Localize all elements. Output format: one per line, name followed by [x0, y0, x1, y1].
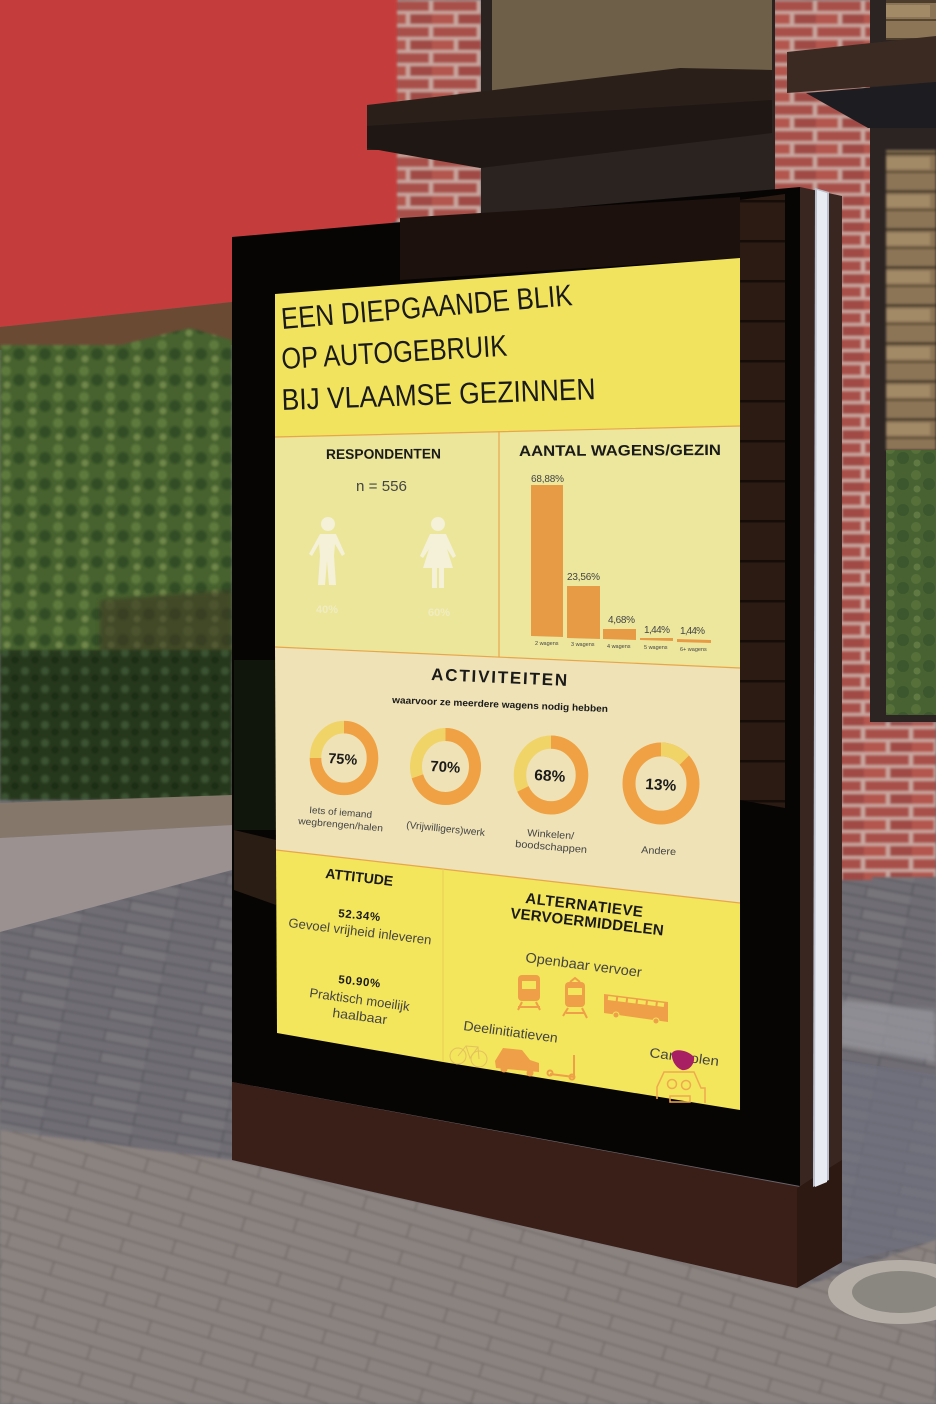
label: [297, 805, 383, 834]
icon: tram: [563, 978, 587, 1018]
wood reflection right: [740, 194, 785, 808]
stat 50.90%: haalbaar: [332, 1005, 389, 1027]
donut 68%: 68%: [534, 767, 566, 786]
icon: man 40%: [309, 517, 345, 616]
bar chart: [531, 474, 711, 653]
kiosk: display stand: [232, 187, 842, 1288]
panel: alternatives background: [443, 869, 740, 1110]
label: [515, 828, 587, 856]
label: Iets of iemand: [309, 805, 372, 821]
icon: scooter: [548, 1056, 575, 1080]
panel: activities background: [275, 647, 740, 903]
heading: respondenten: RESPONDENTEN: [326, 445, 441, 462]
bar chart: 2 wagens: [535, 641, 559, 647]
manhole: [828, 1260, 936, 1324]
subtitle activiteiten: waarvoor ze meerdere wagens nodig hebben: [391, 695, 608, 715]
bar chart: 4 wagens: [607, 644, 631, 650]
bar chart: 1,44%: [680, 626, 705, 637]
icon: man 40%: 40%: [316, 604, 338, 616]
shop window centre: [481, 0, 775, 225]
label: carpoolen: Carpoolen: [649, 1045, 720, 1069]
icon: carpool car: [657, 1072, 705, 1103]
icon: woman 60%: 60%: [428, 607, 450, 619]
label: Winkelen/: [527, 828, 575, 842]
donut 75%: [297, 727, 383, 834]
label: Andere: [641, 845, 677, 858]
stat 50.90%: [309, 974, 411, 1027]
stat 52.34%: Gevoel vrijheid inleveren: [288, 915, 432, 948]
bar chart: 5 wagens: [644, 645, 668, 651]
title: OP AUTOGEBRUIK: [280, 330, 508, 376]
heading: attitude: ATTITUDE: [325, 865, 394, 889]
warm paving lower right: [0, 1130, 936, 1404]
donut 75%: 75%: [328, 751, 358, 769]
title: EEN DIEPGAANDE BLIK: [280, 279, 574, 336]
shop window right: [870, 0, 936, 722]
red wall: [0, 0, 398, 327]
label: openbaar vervoer: Openbaar vervoer: [525, 949, 643, 980]
icon: purple blot: [672, 1050, 694, 1070]
heading: aantal wagens/gezin: AANTAL WAGENS/GEZIN: [519, 442, 721, 460]
heading: alternatieve vervoermiddelen: [510, 890, 664, 939]
title: [280, 279, 596, 417]
panel: title background: [275, 258, 740, 437]
bar chart: 6+ wagens: [680, 647, 707, 653]
donut 68%: [515, 742, 587, 856]
stat 50.90%: 50.90%: [338, 974, 381, 990]
heading: alternatieve vervoermiddelen: VERVOERMIDDELEN: [510, 905, 664, 939]
icon: woman 60%: [420, 517, 456, 619]
curb: [0, 795, 232, 838]
bar chart: 1,44%: [644, 625, 670, 636]
lit paving on the right: [840, 1000, 936, 1062]
section dividers: [275, 426, 740, 903]
bar chart: 23,56%: [567, 572, 600, 583]
heading: activiteiten: ACTIVITEITEN: [431, 665, 568, 690]
hedge: [0, 328, 232, 655]
donut 13%: 13%: [645, 776, 677, 795]
side frame: [800, 187, 842, 1186]
title: BIJ VLAAMSE GEZINNEN: [281, 373, 596, 417]
panel: cars per household background: [499, 426, 740, 668]
icon: bus: [604, 994, 668, 1024]
panel: respondents background: [275, 431, 499, 657]
screen glass: [232, 187, 800, 1186]
poster: [275, 258, 740, 1110]
stand base: [232, 1082, 842, 1288]
panel: attitude background: [276, 850, 443, 1062]
label: boodschappen: [515, 839, 587, 856]
label: deelinitiatieven: Deelinitiatieven: [463, 1018, 559, 1046]
bar chart: 4,68%: [608, 615, 635, 626]
stat 52.34%: 52.34%: [338, 908, 381, 924]
heading: alternatieve vervoermiddelen: ALTERNATIEVE: [525, 890, 644, 921]
brick facade: [397, 0, 481, 225]
bar chart: 3 wagens: [571, 642, 595, 648]
donut 70%: 70%: [430, 758, 461, 777]
awnings: [367, 68, 772, 150]
divider attitude: [442, 869, 444, 1062]
bar chart: 68,88%: [531, 474, 564, 485]
donut 70%: [406, 734, 486, 839]
label: wegbrengen/halen: [297, 816, 383, 834]
sample size: n = 556: [356, 479, 407, 495]
donut 13%: [629, 749, 693, 858]
icon: car: [495, 1048, 539, 1076]
icon: bicycle: [450, 1046, 487, 1067]
stat 50.90%: Praktisch moeilijk: [309, 985, 411, 1014]
label: (Vrijwilligers)werk: [406, 820, 486, 839]
icon: train: [518, 975, 540, 1010]
